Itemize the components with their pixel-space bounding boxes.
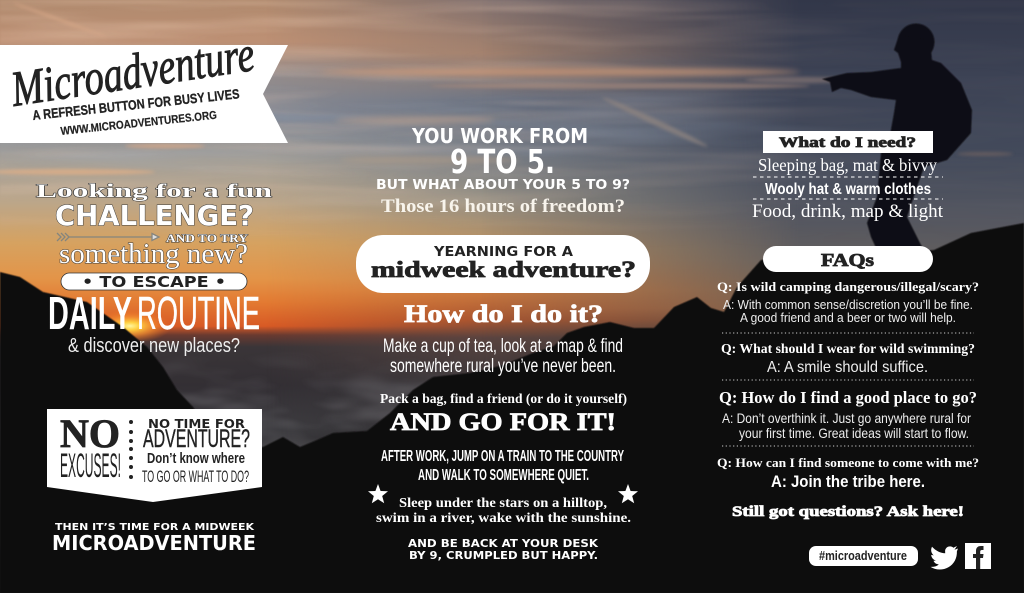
panel: what do I need: What do I need? xyxy=(779,135,916,151)
sleep under the stars text: swim in a river, wake with the sunshine. xyxy=(376,511,631,526)
back at your desk text xyxy=(408,537,598,562)
don't know where: Don’t know where xyxy=(147,451,245,467)
how do I do it section: somewhere rural you’ve never been. xyxy=(390,356,616,377)
hashtag pill xyxy=(809,546,918,566)
how do I do it section: Pack a bag, find a friend (or do it yourself) xyxy=(380,391,627,406)
icon: star right xyxy=(618,484,638,503)
panel: faq list xyxy=(717,279,979,520)
banner title: Microadventure xyxy=(7,25,258,117)
panel: what do I need: Wooly hat & warm clothes xyxy=(765,181,931,198)
looking for a fun: Looking for a fun xyxy=(36,181,273,202)
centre column: intro: 9 TO 5. xyxy=(450,142,555,181)
routine: ROUTINE xyxy=(137,287,260,339)
and to try: AND TO TRY xyxy=(166,231,248,245)
how do I do it section: Make a cup of tea, look at a map & find xyxy=(383,336,623,357)
panel: faq list: A: A smile should suffice. xyxy=(767,359,928,376)
back at your desk text: BY 9, CRUMPLED BUT HAPPY. xyxy=(409,549,598,562)
icon: star left xyxy=(368,484,388,503)
panel: faq list: Still got questions? Ask here! xyxy=(732,504,964,520)
back at your desk text: AND BE BACK AT YOUR DESK xyxy=(408,537,598,550)
arrow xyxy=(57,233,159,241)
panel: faq list: Q: How do I find a good place to go? xyxy=(719,388,977,407)
challenge: CHALLENGE? xyxy=(55,199,254,232)
hiker silhouette xyxy=(822,24,972,250)
centre column: intro xyxy=(376,124,630,217)
no time for: NO TIME FOR xyxy=(148,416,245,431)
left column: challenge questions xyxy=(36,181,273,357)
how do I do it section xyxy=(380,301,627,484)
mountain silhouettes xyxy=(0,223,1024,593)
pill: yearning for a midweek adventure: midweek adventure? xyxy=(371,257,636,282)
dotted divider xyxy=(129,420,133,479)
icon: twitter bird xyxy=(930,546,958,570)
to go or what to do: TO GO OR WHAT TO DO? xyxy=(142,467,249,486)
panel: faq list: A: Join the tribe here. xyxy=(771,472,925,491)
panel: faq list: A: Don’t overthink it. Just go anywhere rural for xyxy=(722,410,971,426)
no excuses box xyxy=(47,409,262,502)
panel: faq list: your first time. Great ideas will start to flow. xyxy=(739,425,969,441)
centre column: intro: BUT WHAT ABOUT YOUR 5 TO 9? xyxy=(376,178,630,193)
discover new places: & discover new places? xyxy=(68,335,240,357)
panel: what do I need: Sleeping bag, mat & bivvy xyxy=(758,155,937,175)
something new: something new? xyxy=(59,239,248,270)
pill: yearning for a midweek adventure: YEARNING FOR A xyxy=(433,244,574,260)
panel: faq list: Q: How can I find someone to come with me? xyxy=(717,455,979,470)
to escape pill: • TO ESCAPE • xyxy=(82,273,226,291)
no: NO xyxy=(60,411,120,456)
faqs heading pill xyxy=(763,246,933,272)
to escape pill xyxy=(61,273,247,291)
panel: faq list: A good friend and a beer or two will help. xyxy=(740,310,956,325)
midweek microadventure callout: MICROADVENTURE xyxy=(52,531,256,555)
daily routine: DAILY xyxy=(48,287,132,339)
icon: facebook xyxy=(965,543,991,569)
panel: faq list: A: With common sense/discretion you’ll be fine. xyxy=(723,297,973,312)
how do I do it section: How do I do it? xyxy=(404,301,603,328)
panel: what do I need: Food, drink, map & light xyxy=(752,202,944,222)
faqs heading pill: FAQs xyxy=(821,250,874,270)
how do I do it section: AND GO FOR IT! xyxy=(390,409,616,436)
how do I do it section: AND WALK TO SOMEWHERE QUIET. xyxy=(418,467,589,484)
hashtag pill: #microadventure xyxy=(819,548,907,563)
adventure: ADVENTURE? xyxy=(143,425,250,453)
banner xyxy=(0,25,288,143)
centre column: intro: YOU WORK FROM xyxy=(411,124,588,148)
sleep under the stars text xyxy=(376,496,631,526)
panel: faq list: Q: Is wild camping dangerous/illegal/scary? xyxy=(717,279,979,294)
sleep under the stars text: Sleep under the stars on a hilltop, xyxy=(399,496,607,511)
banner subtitle: A REFRESH BUTTON FOR BUSY LIVES xyxy=(32,86,240,123)
no excuses box: EXCUSES! xyxy=(60,447,121,485)
panel: faq list: Q: What should I wear for wild swimming? xyxy=(721,341,975,356)
banner website: WWW.MICROADVENTURES.ORG xyxy=(60,110,217,138)
panel: what do I need xyxy=(752,131,944,222)
centre column: intro: Those 16 hours of freedom? xyxy=(381,196,625,217)
pill: yearning for a midweek adventure xyxy=(356,235,650,293)
how do I do it section: AFTER WORK, JUMP ON A TRAIN TO THE COUNTRY xyxy=(381,448,624,465)
midweek microadventure callout: THEN IT’S TIME FOR A MIDWEEK xyxy=(55,522,255,533)
